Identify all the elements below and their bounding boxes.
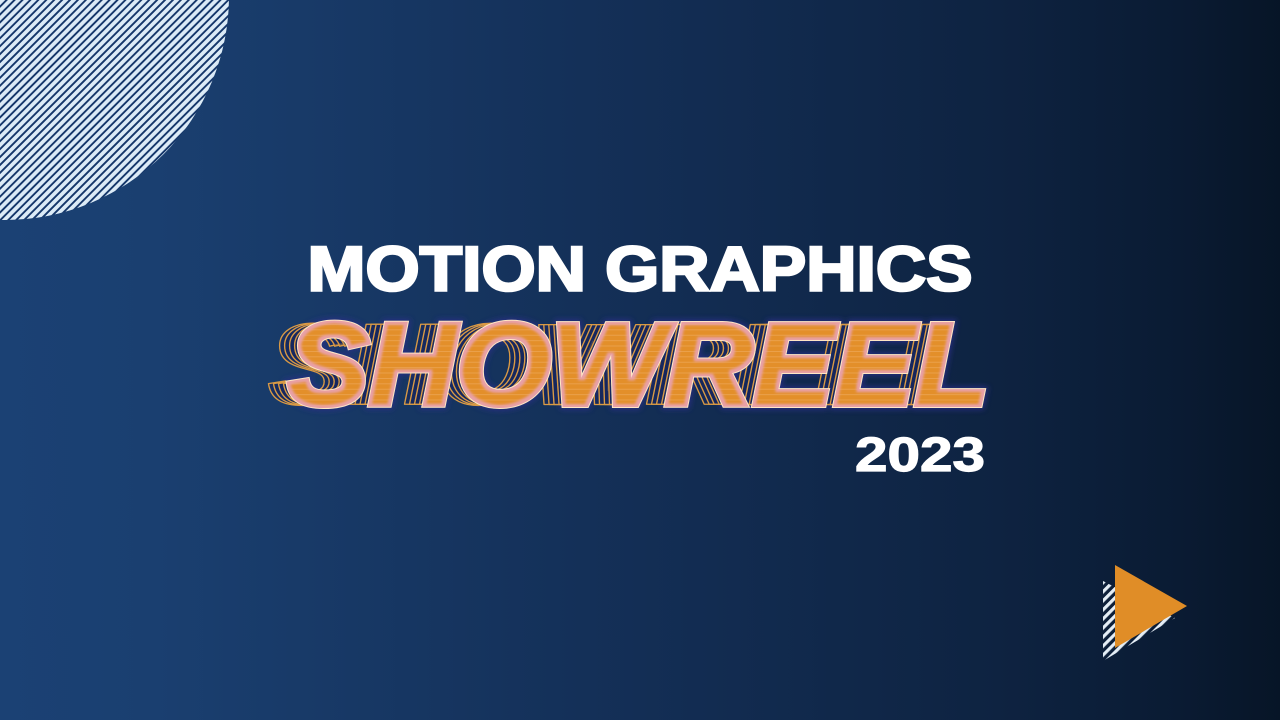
showreel echo outlines: SHOWREEL <box>282 300 983 430</box>
play button triangle <box>1115 565 1187 648</box>
decorative striped quarter circle <box>0 0 229 220</box>
showreel echo outlines: SHOWREEL <box>277 300 978 430</box>
showreel cream outline: SHOWREEL <box>288 300 989 430</box>
showreel pink band: SHOWREEL <box>288 300 989 430</box>
year: 2023: 2023 <box>855 429 985 482</box>
showreel echo outlines: SHOWREEL <box>272 300 973 430</box>
showreel orange fill with scan lines: SHOWREEL <box>288 300 989 430</box>
showreel echo outlines: SHOWREEL <box>267 300 968 430</box>
icon: play button <box>1103 565 1187 661</box>
heading: showreel <box>267 300 989 430</box>
title: motion graphics: MOTION GRAPHICS <box>308 234 972 304</box>
play button hatched shadow <box>1103 581 1175 661</box>
showreel glow: SHOWREEL <box>288 300 989 430</box>
